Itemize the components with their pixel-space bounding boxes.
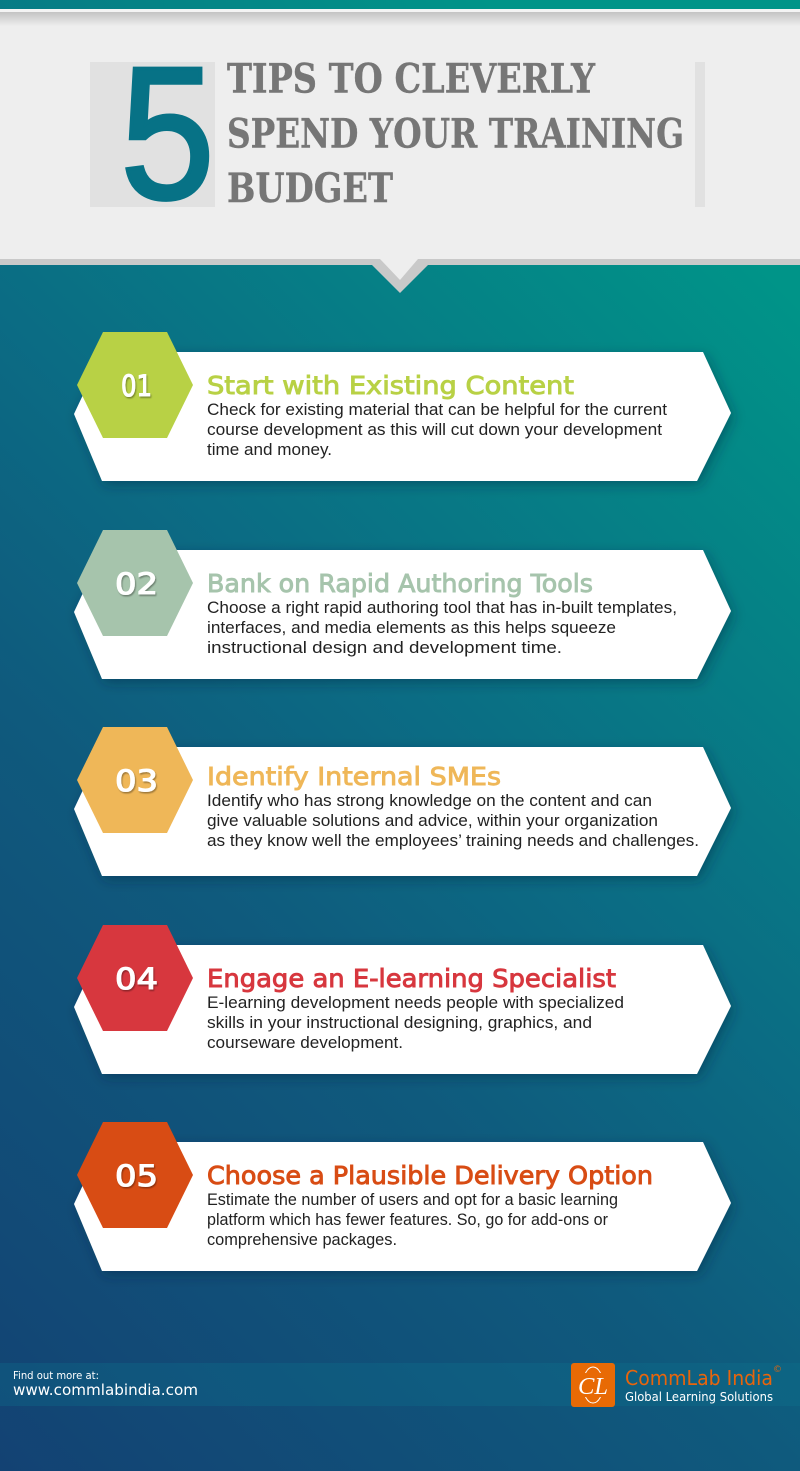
- logo: [571, 1363, 782, 1407]
- tip card 03: Identify Internal SMEs: [207, 762, 501, 791]
- tip card 01: time and money.: [207, 441, 332, 459]
- tip card 01: course development as this will cut down your development: [207, 421, 662, 439]
- tip card 01: Check for existing material that can be helpful for the current: [207, 401, 667, 419]
- big number 5: 5: [120, 28, 214, 238]
- logo: CommLab India: [625, 1366, 773, 1390]
- tip card 01: 01: [121, 369, 152, 403]
- tip card 03: as they know well the employees’ training needs and challenges.: [207, 832, 699, 850]
- title: TIPS TO CLEVERLY: [227, 56, 595, 102]
- tip card 02: Bank on Rapid Authoring Tools: [207, 569, 593, 598]
- tip card 05: 05: [115, 1159, 158, 1193]
- tip card 01: Start with Existing Content: [207, 371, 574, 400]
- tip card 05: Estimate the number of users and opt for a basic learning: [207, 1191, 618, 1209]
- tip card 03: [74, 727, 731, 876]
- logo: CL: [578, 1374, 608, 1400]
- tip card 05: Choose a Plausible Delivery Option: [207, 1161, 653, 1190]
- tip card 05: [74, 1122, 731, 1271]
- tip card 02: Choose a right rapid authoring tool that has in-built templates,: [207, 599, 677, 617]
- tip card 02: interfaces, and media elements as this helps squeeze: [207, 619, 616, 637]
- tip card 03: give valuable solutions and advice, within your organization: [207, 812, 658, 830]
- tip card 04: skills in your instructional designing, graphics, and: [207, 1014, 592, 1032]
- footer link text: Find out more at:: [13, 1370, 99, 1382]
- tip card 05: comprehensive packages.: [207, 1231, 397, 1249]
- footer link text: [13, 1370, 198, 1399]
- footer band: [0, 1363, 800, 1406]
- header panel: [0, 9, 800, 293]
- tip card 05: platform which has fewer features. So, go for add-ons or: [207, 1211, 608, 1229]
- tip card 04: 04: [115, 962, 158, 996]
- title: SPEND YOUR TRAINING: [227, 110, 684, 158]
- footer link text: www.commlabindia.com: [13, 1381, 198, 1399]
- tip card 03: 03: [115, 764, 158, 798]
- title: [227, 56, 705, 212]
- tip card 01: [74, 332, 731, 481]
- logo: ©: [773, 1365, 782, 1375]
- tip card 04: courseware development.: [207, 1034, 403, 1052]
- title: BUDGET: [227, 165, 393, 212]
- tip card 03: Identify who has strong knowledge on the content and can: [207, 792, 652, 810]
- tip card 02: 02: [115, 567, 158, 601]
- big number 5: [90, 28, 215, 238]
- tip card 04: E-learning development needs people with specialized: [207, 994, 624, 1012]
- logo: Global Learning Solutions: [625, 1389, 773, 1404]
- tip card 04: Engage an E-learning Specialist: [207, 964, 616, 993]
- tip card 02: [74, 530, 731, 679]
- tip card 04: [74, 925, 731, 1074]
- tip card 02: instructional design and development time.: [207, 639, 562, 657]
